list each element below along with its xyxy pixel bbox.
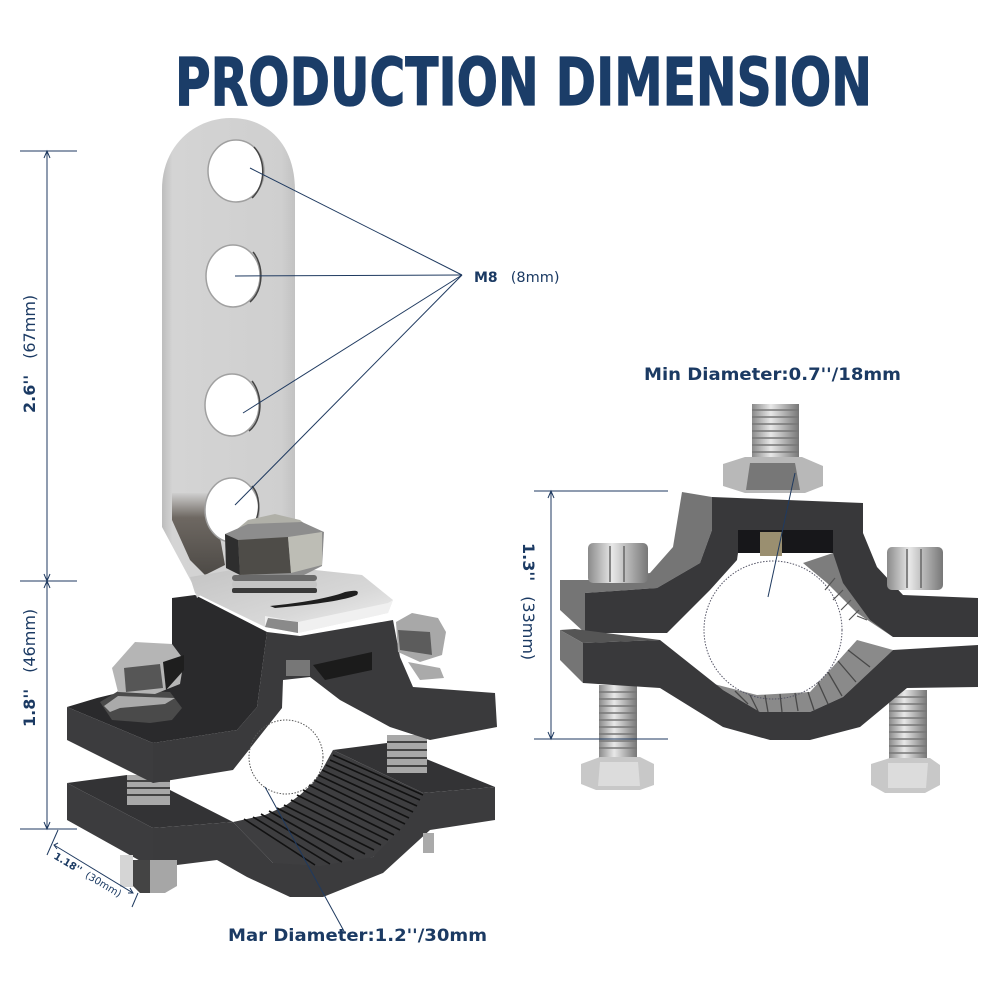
black clamp upper half [67, 595, 497, 783]
top bolt and nut [225, 514, 324, 593]
label: 2.6 inch: 2.6''(67mm) [20, 295, 39, 413]
left clamp with bracket [67, 118, 497, 897]
dimension: 1.8 inch height [20, 581, 77, 829]
label: 1.18 inch: 1.18''(30mm) [51, 851, 123, 900]
bolt studs left clamp [120, 735, 434, 893]
upper-right nut [396, 613, 446, 680]
min diameter circle and leader [704, 473, 842, 699]
label: M8: M8 (8mm) [474, 270, 559, 286]
lower bolts [581, 685, 940, 793]
lower-left nut [100, 642, 184, 723]
max diameter circle and leader [249, 720, 345, 933]
dimension: 1.18 inch width [47, 830, 138, 907]
serrated grooves [233, 750, 423, 866]
label: min diameter: Min Diameter:0.7''/18mm [644, 365, 901, 384]
label: max diameter: Mar Diameter:1.2''/30mm [228, 926, 487, 945]
label: 1.3 inch: 1.3'' (33mm) [519, 543, 538, 660]
upper half front [585, 497, 978, 637]
upper half, ribbed interior [803, 553, 893, 637]
right clamp [560, 404, 978, 793]
stainless bracket [162, 118, 393, 633]
upper half, grey side [560, 492, 712, 633]
black clamp lower half [67, 743, 495, 897]
dimension: 1.3 inch height [534, 491, 668, 739]
bracket holes [205, 140, 264, 542]
dimension line: bracket holes M8 leaders [235, 168, 462, 505]
dimension: 2.6 inch height [20, 151, 77, 581]
cap screws [588, 543, 943, 590]
lower half [560, 629, 978, 740]
label: 1.8 inch: 1.8''(46mm) [20, 609, 39, 727]
top threaded bolt [723, 404, 823, 493]
